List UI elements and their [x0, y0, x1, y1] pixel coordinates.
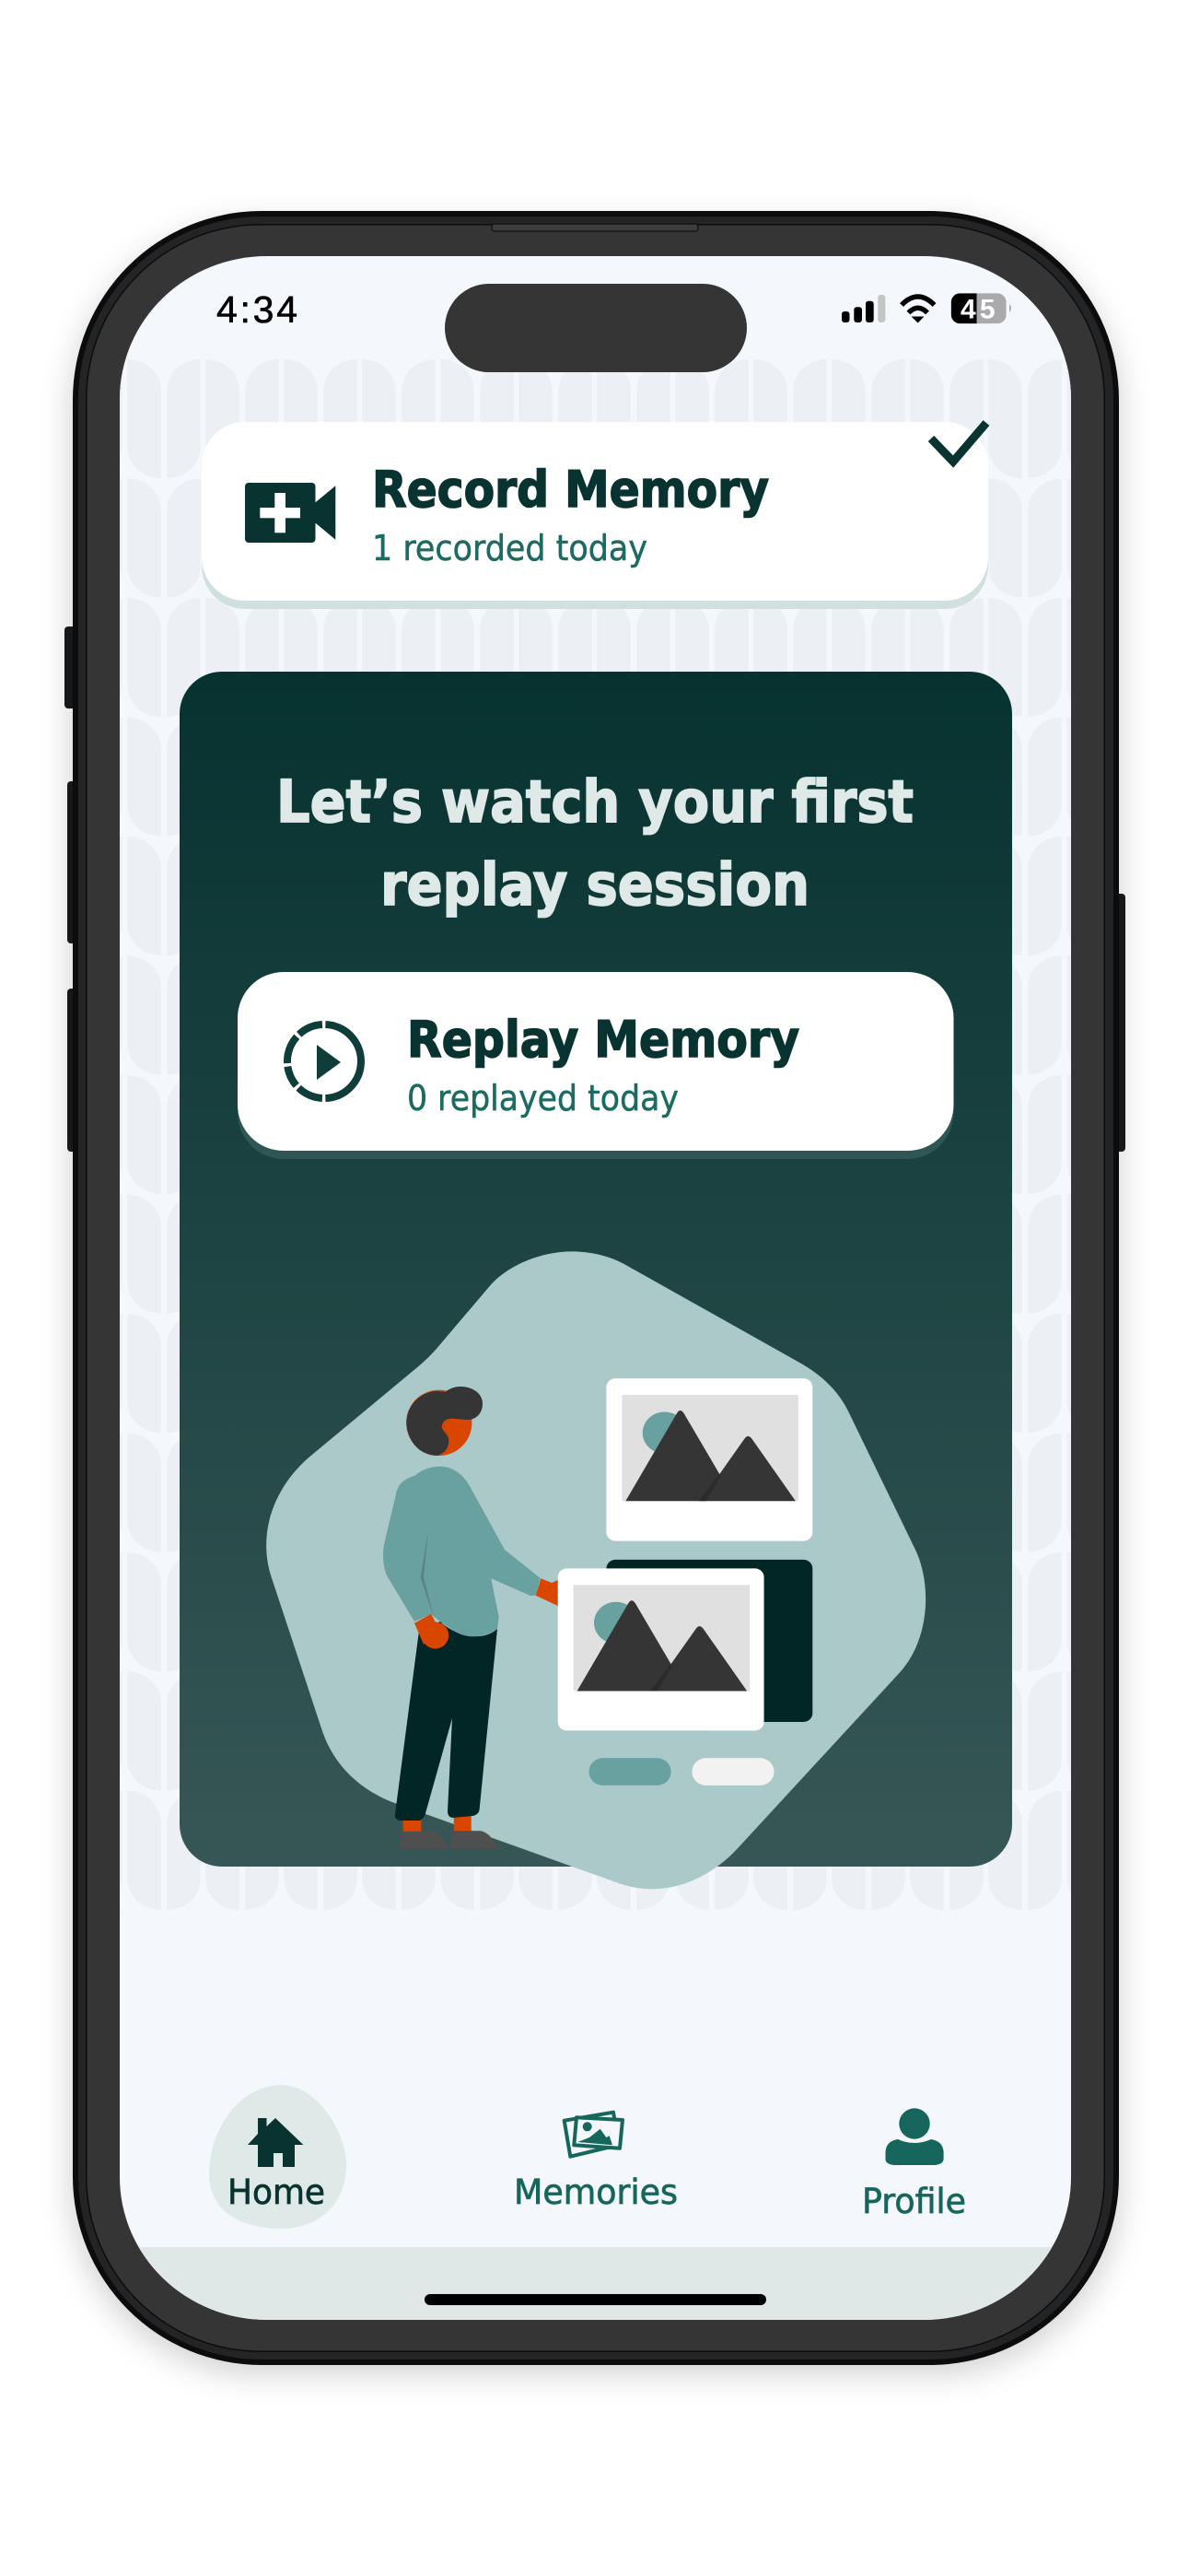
icon: checkmark	[931, 423, 986, 462]
dark backing card	[606, 1560, 812, 1722]
phone mockup page	[57, 208, 1135, 2388]
tab: home	[209, 2085, 346, 2229]
illustration backdrop blob	[266, 1251, 926, 1889]
front photo card	[558, 1568, 764, 1730]
status bar time: 4:34	[216, 288, 297, 331]
card: record memory	[202, 422, 988, 609]
app screen	[120, 256, 1071, 2320]
indicator pills	[589, 1758, 775, 1786]
phone frame	[73, 211, 1119, 2365]
icon: video camera plus	[245, 483, 335, 543]
icon: house	[248, 2118, 303, 2167]
heading: first replay session: replay session	[380, 851, 809, 919]
tab: memories: Memories	[514, 2172, 678, 2212]
sweater fold	[421, 1531, 435, 1620]
status icon: battery: 45	[961, 295, 995, 324]
phone drop shadow	[70, 221, 1122, 2375]
tab: home: Home	[227, 2172, 325, 2212]
card: replay memory	[238, 972, 954, 1159]
status icon: wifi	[902, 297, 934, 322]
tab: profile	[862, 2108, 966, 2221]
tab bar	[209, 2085, 966, 2229]
illustration: person viewing photos	[266, 1251, 926, 1889]
heading: first replay session	[276, 768, 914, 919]
heading: replay memory: Replay Memory	[407, 1011, 799, 1069]
person shoes and socks	[400, 1814, 499, 1849]
home indicator	[425, 2294, 766, 2305]
person trousers	[395, 1622, 497, 1821]
panel: replay session	[180, 672, 1012, 1867]
person pocket hand	[414, 1614, 448, 1649]
top speaker	[492, 224, 698, 231]
tab: memories	[514, 2113, 678, 2212]
top photo card	[606, 1378, 812, 1541]
status icon: signal	[842, 295, 885, 322]
person far hand	[536, 1578, 564, 1609]
heading: first replay session: Let’s watch your first	[276, 768, 914, 836]
text: replayed today: 0 replayed today	[407, 1078, 679, 1118]
bottom home indicator strip	[120, 2247, 1071, 2320]
dynamic island	[445, 284, 747, 372]
status icon: battery	[951, 293, 1011, 324]
text: recorded today: 1 recorded today	[372, 528, 647, 568]
icon: replay play circle	[286, 1024, 362, 1099]
person head and hair	[406, 1387, 483, 1456]
phone side buttons	[64, 626, 1125, 1152]
person sweater	[383, 1467, 541, 1636]
background leaf pattern	[120, 364, 1071, 398]
heading: record memory: Record Memory	[372, 461, 769, 519]
person	[383, 1387, 564, 1849]
icon: person	[886, 2108, 944, 2165]
icon: photo stack	[565, 2113, 623, 2157]
tab: profile: Profile	[862, 2182, 966, 2221]
